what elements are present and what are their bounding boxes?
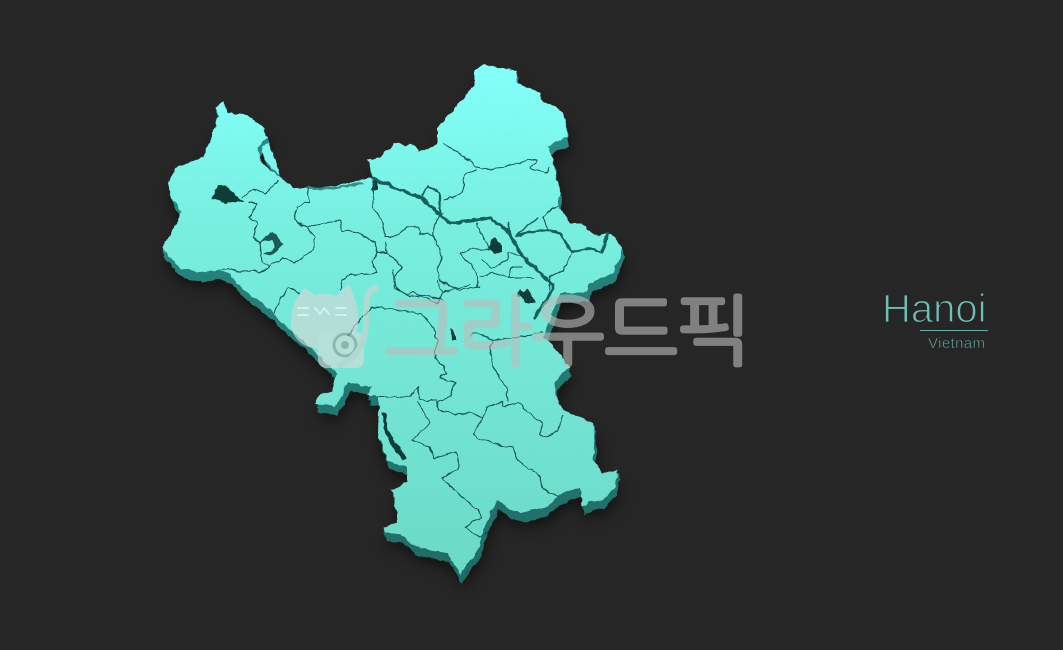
- title underline: [920, 330, 988, 331]
- watermark text: 그라우드픽: [385, 293, 751, 369]
- map shadow: [165, 78, 625, 589]
- cat head: [291, 284, 359, 349]
- district boundaries: [218, 143, 572, 537]
- title: Hanoi: Hanoi: [882, 287, 987, 331]
- camera: [318, 332, 364, 368]
- lakes and water bodies: [212, 178, 536, 461]
- cat face: [298, 308, 346, 315]
- river: Red River main channel: [307, 178, 608, 318]
- watermark: cat and camera logo: [291, 284, 376, 368]
- subtitle: Vietnam: Vietnam: [928, 335, 985, 352]
- map top surface: [162, 64, 622, 575]
- tail arc: [340, 288, 376, 365]
- map extruded side: [163, 67, 624, 584]
- map: Hanoi 3D districts: [162, 64, 624, 584]
